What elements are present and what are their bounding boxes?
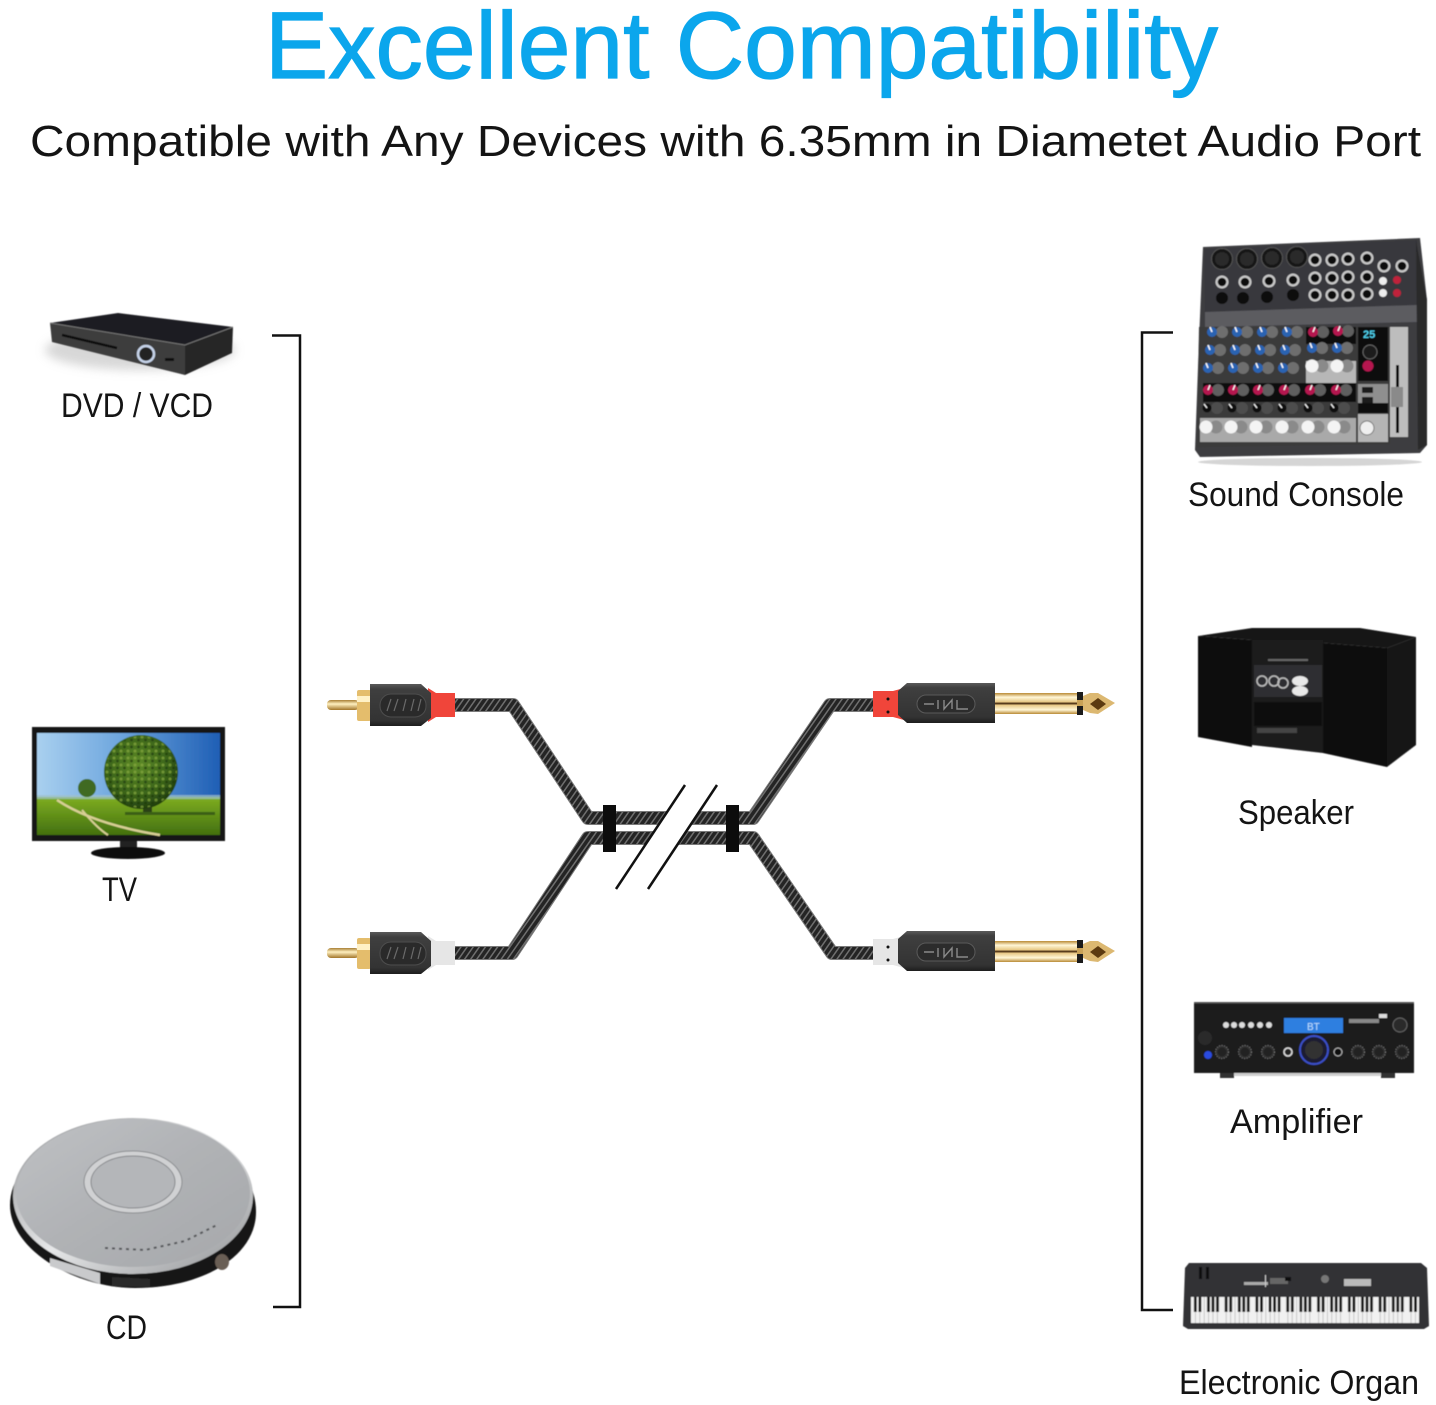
- icon: speaker stereo: [1198, 628, 1416, 767]
- jack plug white: [873, 931, 1115, 971]
- left bracket: [272, 336, 300, 1307]
- cable illustration: [327, 683, 1115, 974]
- icon: CD player: [10, 1118, 256, 1288]
- label: TV: TV: [102, 871, 137, 909]
- icon: amplifier: BT: [1307, 1022, 1320, 1033]
- label: Electronic Organ: Electronic Organ: [1179, 1364, 1419, 1402]
- right bracket: [1142, 332, 1173, 1310]
- label: CD: CD: [106, 1309, 147, 1347]
- break gap: [616, 785, 717, 889]
- icon: amplifier: [1194, 1002, 1414, 1078]
- label: DVD / VCD: DVD / VCD: [61, 387, 213, 425]
- jack plug red: [873, 683, 1115, 723]
- icon: DVD player: [45, 313, 235, 375]
- label: Amplifier: Amplifier: [1230, 1103, 1363, 1141]
- break slashes: [616, 785, 717, 889]
- subtitle: Compatible with Any Devices with 6.35mm in Diametet Audio Port: [30, 117, 1421, 166]
- icon: mixing console: 25: [1363, 329, 1375, 341]
- label: Sound Console: Sound Console: [1188, 476, 1404, 514]
- RCA plug white: [327, 932, 455, 974]
- right clip: [726, 805, 739, 852]
- label: Speaker: Speaker: [1238, 794, 1354, 832]
- icon: mixing console: [1195, 238, 1427, 466]
- icon: electronic organ keyboard: [1183, 1263, 1429, 1329]
- RCA plug red: [327, 684, 455, 726]
- icon: TV: [32, 727, 225, 859]
- braided cable strands: [455, 705, 873, 953]
- left clip: [603, 805, 616, 852]
